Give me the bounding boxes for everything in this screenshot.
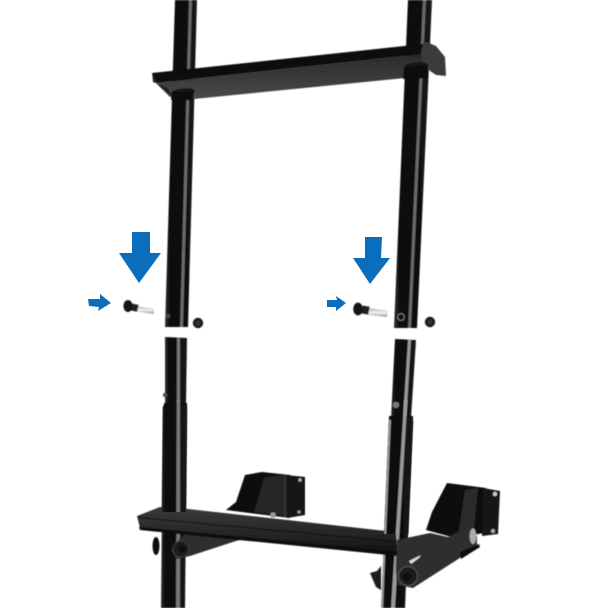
- right lower arm: [370, 527, 480, 590]
- left nut: [193, 318, 203, 328]
- left upper tube: [165, 0, 197, 327]
- arrow: left horizontal: [88, 294, 111, 311]
- left tube in front of lower rung: [161, 400, 188, 512]
- right lower tube: [381, 339, 416, 608]
- arrow: right horizontal: [327, 296, 346, 311]
- arrow: left down: [119, 232, 161, 283]
- right upper tube: [394, 0, 432, 328]
- left lower tube: [161, 337, 187, 608]
- left lower arm: [152, 532, 242, 559]
- ladder assembly diagram: [88, 0, 501, 608]
- bracket pivot bolt: [270, 512, 276, 518]
- top rung: [152, 41, 446, 100]
- right screw: [353, 303, 387, 317]
- arrow: right down: [353, 237, 390, 284]
- right tube in front of lower rung: [384, 400, 414, 534]
- right nut: [425, 317, 435, 327]
- right bracket: [426, 483, 500, 538]
- lower rung: [137, 507, 399, 556]
- left bracket: [226, 472, 305, 518]
- left screw: [123, 300, 154, 314]
